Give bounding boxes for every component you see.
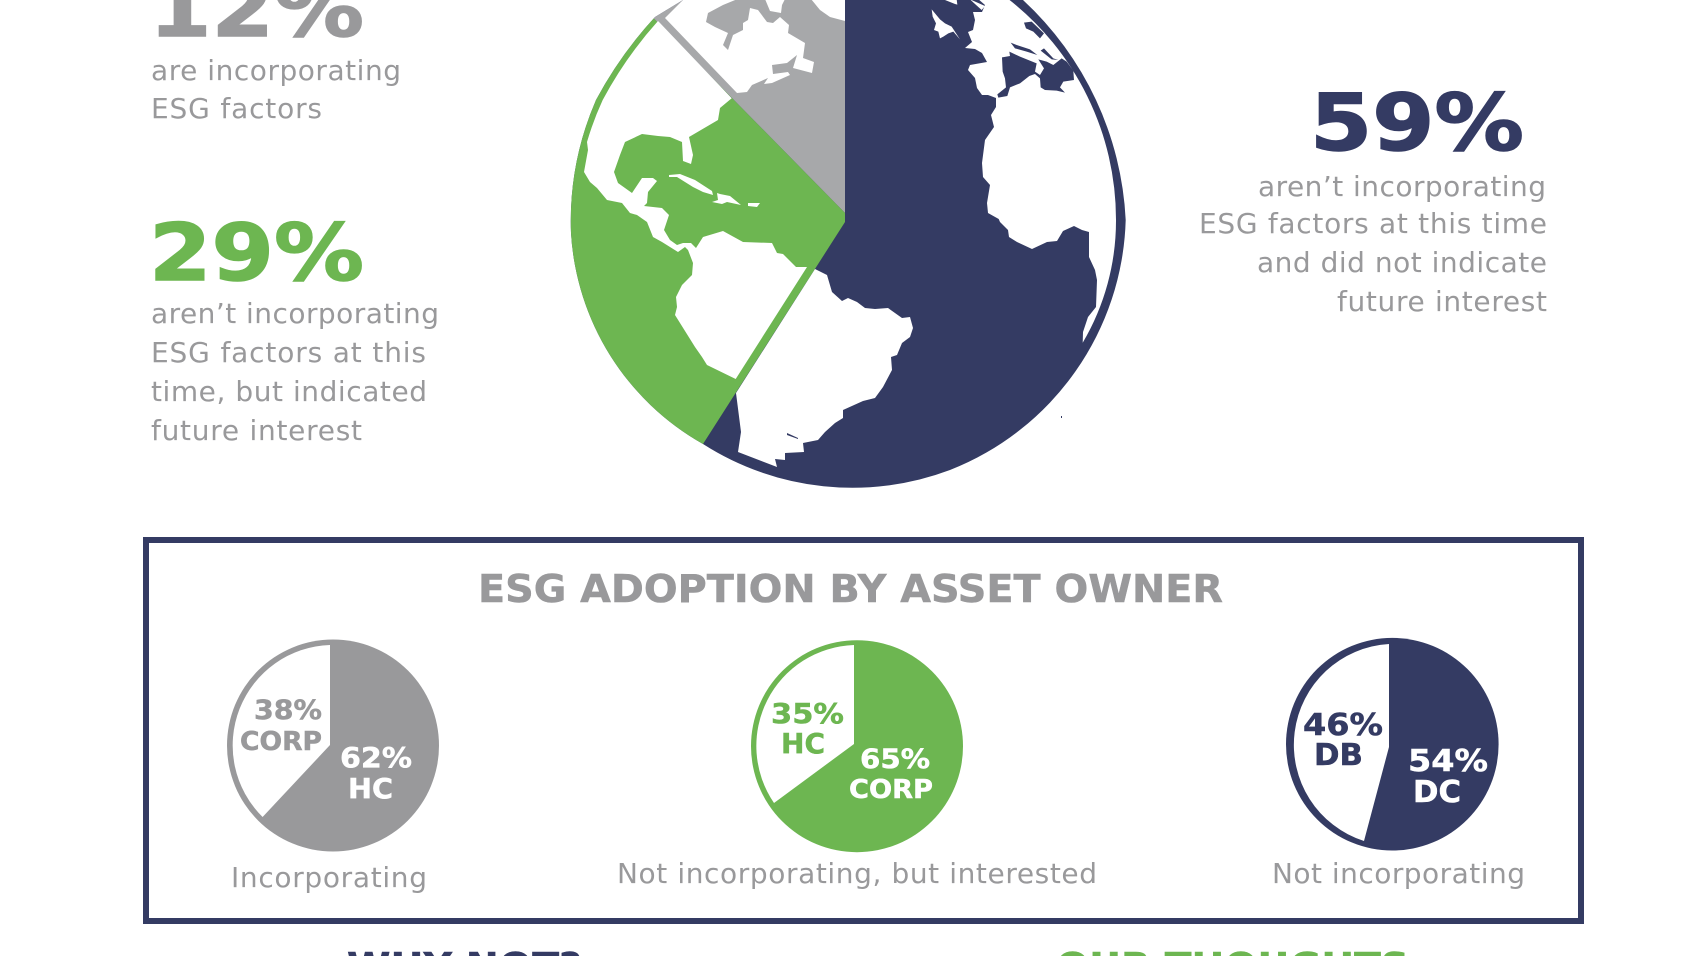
stat: 29% interested [149,209,439,447]
stat: 59% not incorporating [1199,79,1547,318]
stat: 12% incorporating: ESG factors [151,92,322,125]
pie: incorporating: 38% [254,695,322,726]
grey wedge: 12% [640,0,845,213]
stat: 12% incorporating: are incorporating [151,54,401,87]
stat: 59% not incorporating: ESG factors at this time [1199,207,1547,240]
continent: Americas west of the divide [584,21,807,379]
pie: not incorporating: DB [1314,738,1363,773]
pie: incorporating: 62% [340,741,412,774]
stat: 29% interested: aren’t incorporating [151,297,439,330]
globe pie chart [570,0,1126,488]
stat: 59% not incorporating: 59% [1310,79,1524,169]
stat: 59% not incorporating: aren’t incorporating [1258,170,1546,203]
pie: incorporating [227,640,439,852]
globe speck [1061,416,1062,418]
pie: not incorporating: 46% [1303,708,1383,743]
pie: not incorporating, but interested: CORP [849,775,933,805]
caption: not incorporating: Not incorporating [1272,857,1525,890]
pie: incorporating: HC [348,772,393,805]
pie: incorporating: CORP [240,727,322,757]
panel: ESG adoption by asset owner [146,540,1581,921]
stat: 59% not incorporating: and did not indicate [1257,246,1547,279]
stat: 59% not incorporating: future interest [1337,285,1547,318]
pie: not incorporating [1286,638,1499,850]
detail: South America inlet [787,433,798,439]
continent: Africa and Eurasia [965,0,1116,343]
pie: not incorporating: DC [1413,775,1461,810]
continent: Canada and Greenland [665,0,845,93]
stat: 29% interested: time, but indicated [151,375,427,408]
pie: not incorporating, but interested: 65% [860,744,930,775]
pie: not incorporating, but interested: 35% [771,697,844,730]
seas: Mediterranean and Black Sea [997,22,1074,98]
stat: 12% incorporating [149,0,401,125]
caption: incorporating: Incorporating [231,861,427,894]
pie: not incorporating: 54% [1408,744,1488,779]
caption: not incorporating, but interested: Not incorporating, but interested [617,857,1097,890]
green wedge: 29% [570,18,845,444]
navy wedge: 59% [560,0,1140,500]
pie: not incorporating, but interested: HC [781,727,825,760]
stat: 29% interested: future interest [151,414,362,447]
continent: South America east [736,269,913,467]
stat: 29% interested: 29% [149,209,364,299]
panel heading: ESG ADOPTION BY ASSET OWNER [478,567,1223,611]
islands: UK and Scandinavia [932,0,985,39]
islands: Caribbean [669,174,760,207]
pie: not incorporating, but interested [751,640,963,852]
stat: 29% interested: ESG factors at this [151,336,426,369]
